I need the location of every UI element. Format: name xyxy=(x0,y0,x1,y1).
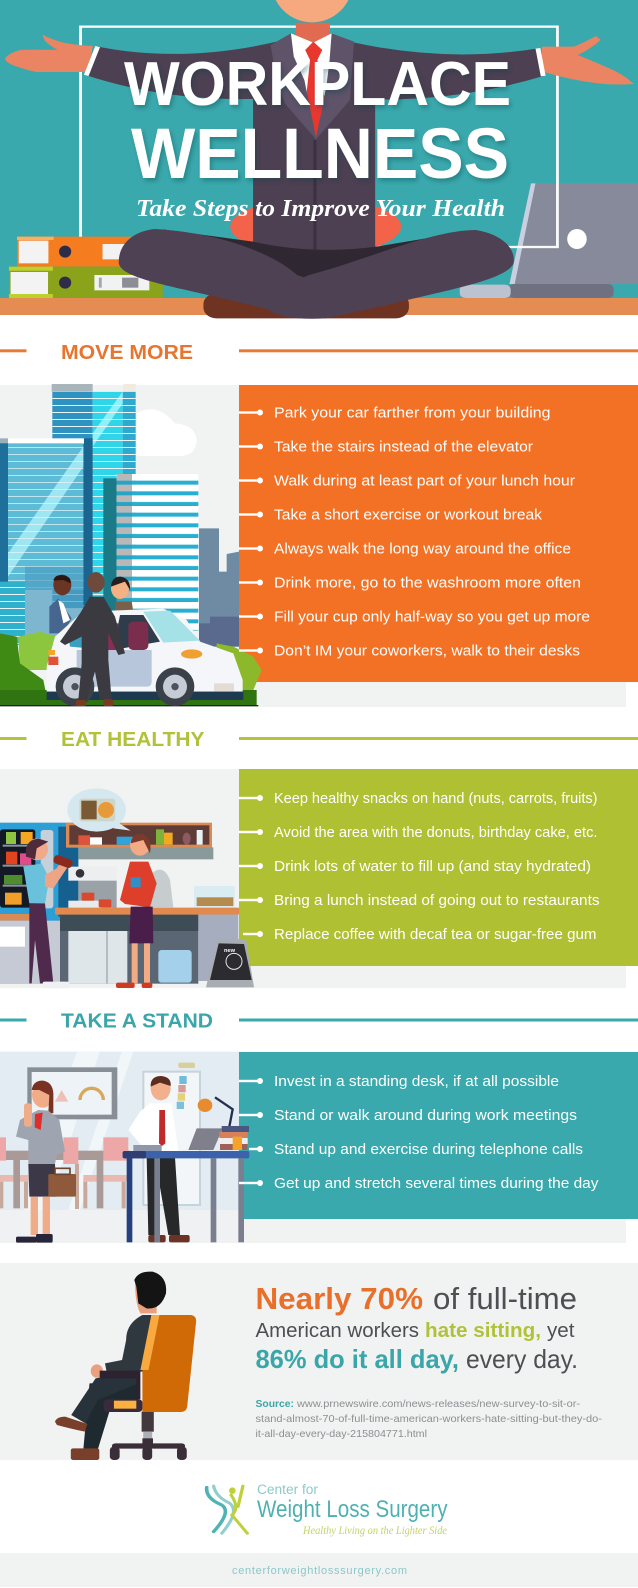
source citation: stand-almost-70-of-full-time-american-workers-hate-sitting-but-they-do- xyxy=(256,1413,603,1425)
stat line 3: every day. xyxy=(466,1344,578,1374)
stat line 3: 86% do it all day, xyxy=(256,1344,459,1374)
subtitle: Take Steps to Improve Your Health xyxy=(136,196,505,222)
bullet connectors xyxy=(239,410,263,654)
source citation: Source: xyxy=(256,1398,294,1410)
bullet texts: Don’t IM your coworkers, walk to their desks xyxy=(274,642,580,659)
left counter xyxy=(0,914,30,921)
bullet list xyxy=(239,404,590,659)
desk xyxy=(0,298,638,315)
businessman xyxy=(60,572,125,706)
bullet texts: Keep healthy snacks on hand (nuts, carrots, fruits) xyxy=(274,790,598,807)
logo title: Weight Loss Surgery xyxy=(257,1496,448,1523)
wall shadow xyxy=(151,870,173,907)
bullet texts: Drink lots of water to fill up (and stay hydrated) xyxy=(274,858,591,875)
bullet texts: Fill your cup only half-way so you get up more xyxy=(274,608,590,625)
section: take a stand xyxy=(0,1010,638,1243)
shoes xyxy=(55,1417,87,1432)
teal list panel xyxy=(239,1052,638,1219)
head and hair xyxy=(134,1272,166,1313)
lapels xyxy=(271,33,317,140)
man drinking xyxy=(23,838,74,988)
heading: eat healthy: EAT HEALTHY xyxy=(61,728,205,751)
hero background xyxy=(0,0,638,298)
water bottles xyxy=(158,950,192,983)
stat line 1: of full-time xyxy=(433,1281,577,1316)
bullet texts: Always walk the long way around the office xyxy=(274,540,571,557)
section: move more xyxy=(0,341,638,707)
website: centerforweightlosssurgery.com xyxy=(232,1565,407,1577)
heading: take a stand: TAKE A STAND xyxy=(61,1010,213,1032)
bullet texts: Invest in a standing desk, if at all possible xyxy=(274,1073,559,1090)
logo tagline: Healthy Living on the Lighter Side xyxy=(302,1523,448,1537)
bullet texts: Take the stairs instead of the elevator xyxy=(274,438,533,455)
left hand xyxy=(5,35,93,72)
stat line 2: yet xyxy=(547,1320,575,1342)
section: eat healthy xyxy=(0,728,638,988)
shelf xyxy=(66,823,213,859)
coworker left xyxy=(49,575,72,633)
hand xyxy=(91,1364,103,1378)
stat line 2: American workers xyxy=(256,1320,419,1342)
laptop xyxy=(460,183,638,298)
cuffs xyxy=(86,47,543,76)
floor xyxy=(0,1210,239,1243)
speech bubble xyxy=(67,788,131,832)
break room illustration xyxy=(0,788,254,988)
lamp xyxy=(198,1097,233,1127)
logo xyxy=(207,1482,448,1537)
a-frame sign xyxy=(206,938,254,987)
skyline xyxy=(199,528,239,647)
bullet texts xyxy=(274,404,590,659)
coffee machine xyxy=(68,867,117,908)
heading: move more: MOVE MORE xyxy=(61,341,193,364)
bullet connectors xyxy=(239,1078,263,1186)
bullet texts xyxy=(274,1073,599,1192)
books xyxy=(218,1126,249,1150)
standing desk xyxy=(123,1151,249,1242)
heading: take a stand xyxy=(0,1010,638,1032)
bullet texts xyxy=(274,790,600,943)
source citation: www.prnewswire.com/news-releases/new-survey-to-sit-or- xyxy=(296,1398,581,1410)
stat line 1 xyxy=(256,1281,577,1316)
raised leg xyxy=(71,1370,138,1423)
tie xyxy=(305,42,326,139)
statistic text xyxy=(256,1281,603,1440)
source citation xyxy=(256,1398,603,1440)
torso xyxy=(253,47,375,250)
chair xyxy=(230,198,401,255)
standing desk illustration xyxy=(0,1052,249,1243)
right hand xyxy=(542,36,634,85)
city and car illustration xyxy=(0,384,262,706)
meeting table and chairs xyxy=(0,1137,130,1209)
statistic panel xyxy=(0,1263,638,1460)
title line 1: WORKPLACE xyxy=(124,50,511,119)
wall chart xyxy=(27,1067,117,1119)
heading: eat healthy xyxy=(0,728,638,751)
flip chart xyxy=(143,1063,200,1205)
tall tower xyxy=(52,384,136,608)
green list panel xyxy=(239,769,638,966)
head xyxy=(271,0,353,22)
panel background xyxy=(0,1263,638,1460)
title line 2: WELLNESS xyxy=(131,115,509,194)
cloud xyxy=(137,409,197,456)
bullet texts: Replace coffee with decaf tea or sugar-free gum xyxy=(274,926,596,943)
footer xyxy=(0,1553,638,1587)
right tower xyxy=(103,474,198,631)
footer band xyxy=(0,1553,638,1587)
woman with cup xyxy=(116,834,157,988)
window glare xyxy=(23,1052,100,1210)
bullet texts: Stand or walk around during work meetings xyxy=(274,1107,577,1124)
lap shadow xyxy=(163,229,476,293)
bullet texts: Get up and stretch several times during the day xyxy=(274,1175,599,1192)
back leg xyxy=(83,1382,138,1450)
title xyxy=(124,50,511,194)
chair back xyxy=(100,1315,196,1412)
seated man illustration xyxy=(55,1272,196,1460)
shoes xyxy=(203,293,409,318)
a-frame sign: new xyxy=(224,948,236,954)
car xyxy=(47,609,243,706)
backing panel xyxy=(0,1052,626,1243)
neck xyxy=(296,23,330,46)
bullet texts: Take a short exercise or workout break xyxy=(274,506,543,523)
left tower xyxy=(0,438,93,605)
backing panel xyxy=(0,769,626,988)
hero illustration back layer xyxy=(9,27,638,298)
vending machine xyxy=(0,823,78,923)
source citation: it-all-day-every-day-215804771.html xyxy=(256,1428,427,1440)
desk folders xyxy=(9,237,163,298)
shirt xyxy=(291,33,332,100)
stat line 2 xyxy=(256,1320,575,1342)
hero header xyxy=(0,0,638,319)
chair base xyxy=(110,1412,187,1460)
coworker right xyxy=(111,577,133,612)
counter xyxy=(55,908,239,984)
logo name: Center for xyxy=(257,1482,319,1497)
meditating businessman xyxy=(5,0,634,319)
low towers xyxy=(0,567,83,645)
bullet list xyxy=(239,1073,599,1192)
arms xyxy=(87,42,293,99)
stat line 2: hate sitting, xyxy=(425,1320,541,1342)
heading: move more xyxy=(0,341,638,364)
man at desk xyxy=(128,1076,190,1242)
backing panel xyxy=(0,385,626,707)
office wall xyxy=(0,1052,239,1210)
pastry display xyxy=(194,886,235,907)
bullet texts: Park your car farther from your building xyxy=(274,404,550,421)
jacket xyxy=(105,1315,153,1372)
bullet texts: Stand up and exercise during telephone calls xyxy=(274,1141,583,1158)
orange list panel xyxy=(239,385,638,682)
logo mark xyxy=(207,1486,247,1533)
left leg xyxy=(119,229,326,318)
woman on phone xyxy=(16,1081,76,1243)
jacket seam xyxy=(313,140,317,250)
stat line 1: Nearly 70% xyxy=(256,1281,423,1316)
bullet list xyxy=(239,790,600,943)
bullet texts: Walk during at least part of your lunch hour xyxy=(274,472,575,489)
bullet texts: Bring a lunch instead of going out to restaurants xyxy=(274,892,600,909)
bullet texts: Drink more, go to the washroom more often xyxy=(274,574,581,591)
bullet texts: Avoid the area with the donuts, birthday cake, etc. xyxy=(274,824,598,841)
bullet connectors xyxy=(239,795,263,937)
laptop xyxy=(188,1128,223,1150)
bushes xyxy=(0,632,262,706)
stat line 3 xyxy=(256,1344,578,1374)
right leg xyxy=(267,230,514,319)
frame xyxy=(81,27,557,247)
